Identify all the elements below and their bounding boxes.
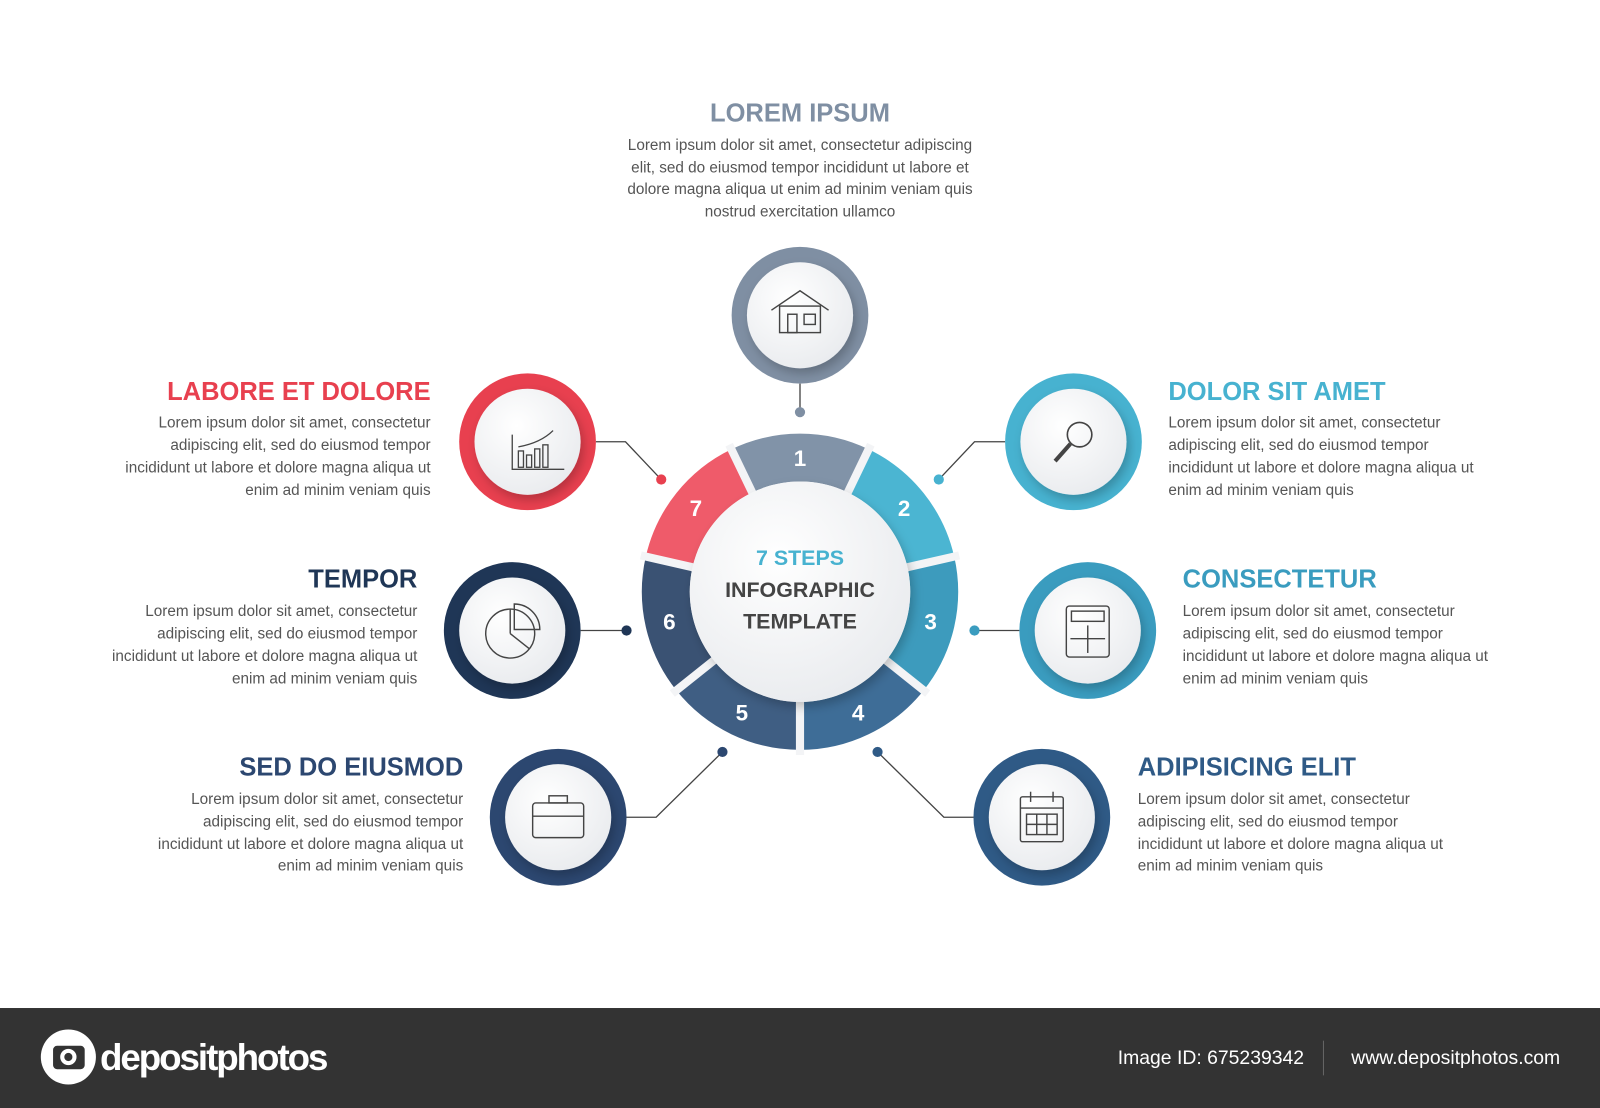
text: tempor: enim ad minim veniam quis xyxy=(232,671,418,688)
center ring chart: 1 xyxy=(794,446,806,471)
text: tempor: adipiscing elit, sed do eiusmod tempor xyxy=(157,626,417,643)
text: dolor sit amet: Lorem ipsum dolor sit amet, consectetur xyxy=(1168,414,1440,431)
text: lorem ipsum: elit, sed do eiusmod tempor incididunt ut labore et xyxy=(631,159,970,176)
text: labore et dolore: LABORE ET DOLORE xyxy=(167,378,431,406)
text: tempor: Lorem ipsum dolor sit amet, consectetur xyxy=(145,603,417,620)
text: labore et dolore: enim ad minim veniam quis xyxy=(245,482,431,499)
circle: tempor (pie chart) xyxy=(444,562,581,699)
circle: consectetur (calculator) xyxy=(1019,562,1156,699)
center ring chart: 4 xyxy=(852,700,865,725)
text: sed do eiusmod: enim ad minim veniam quis xyxy=(278,857,464,874)
text: adipisicing elit: ADIPISICING ELIT xyxy=(1138,753,1356,781)
center ring chart: 2 xyxy=(898,496,910,521)
text: labore et dolore: incididunt ut labore et dolore magna aliqua ut xyxy=(125,459,431,476)
text: sed do eiusmod: incididunt ut labore et dolore magna aliqua ut xyxy=(158,836,464,853)
footer bar: www.depositphotos.com xyxy=(1350,1047,1560,1069)
connector dots xyxy=(621,407,980,757)
text: consectetur: enim ad minim veniam quis xyxy=(1183,671,1368,688)
text: consectetur xyxy=(1183,566,1489,688)
footer logo xyxy=(41,1029,327,1085)
text: labore et dolore: adipiscing elit, sed do eiusmod tempor xyxy=(170,437,431,454)
text: lorem ipsum: LOREM IPSUM xyxy=(710,99,890,127)
center ring chart: 7 xyxy=(690,496,702,521)
text: lorem ipsum: dolore magna aliqua ut enim ad minim veniam quis xyxy=(627,181,973,198)
text: sed do eiusmod: SED DO EIUSMOD xyxy=(239,753,463,781)
text: adipisicing elit xyxy=(1138,753,1444,874)
text: consectetur: adipiscing elit, sed do eiusmod tempor xyxy=(1183,626,1443,643)
circle: labore et dolore (chart) xyxy=(459,373,596,510)
footer bar xyxy=(0,1008,1600,1108)
circle: adipisicing elit (calendar) xyxy=(973,749,1110,886)
text: lorem ipsum: Lorem ipsum dolor sit amet, consectetur adipiscing xyxy=(628,137,972,154)
text: dolor sit amet xyxy=(1168,378,1474,499)
text: tempor: incididunt ut labore et dolore magna aliqua ut xyxy=(112,648,418,665)
center ring chart xyxy=(611,403,989,780)
text: dolor sit amet: DOLOR SIT AMET xyxy=(1168,378,1386,406)
connector lines xyxy=(581,384,1019,817)
center ring chart: 5 xyxy=(736,700,748,725)
center ring chart: TEMPLATE xyxy=(743,609,857,633)
text: labore et dolore xyxy=(125,378,431,499)
text: lorem ipsum: nostrud exercitation ullamco xyxy=(705,203,895,220)
text: adipisicing elit: enim ad minim veniam quis xyxy=(1138,857,1323,874)
center ring chart: INFOGRAPHIC xyxy=(725,578,875,602)
text: consectetur: incididunt ut labore et dolore magna aliqua ut xyxy=(1183,648,1489,665)
text: dolor sit amet: enim ad minim veniam quis xyxy=(1168,482,1354,499)
text: tempor: TEMPOR xyxy=(308,566,417,594)
text: adipisicing elit: incididunt ut labore et dolore magna aliqua ut xyxy=(1138,836,1444,853)
center ring chart: 3 xyxy=(924,610,937,634)
text: lorem ipsum xyxy=(627,99,973,220)
circle: sed do eiusmod (briefcase) xyxy=(490,749,627,886)
footer id: Image ID: 675239342 xyxy=(1118,1047,1304,1069)
text: sed do eiusmod: Lorem ipsum dolor sit amet, consectetur xyxy=(191,791,463,808)
footer logo: depositphotos xyxy=(100,1037,327,1078)
text: consectetur: Lorem ipsum dolor sit amet, consectetur xyxy=(1183,603,1455,620)
center ring chart: 7 STEPS xyxy=(756,546,844,570)
text: dolor sit amet: adipiscing elit, sed do eiusmod tempor xyxy=(1168,437,1429,454)
text: tempor xyxy=(112,566,418,688)
circle: dolor sit amet (magnifier) xyxy=(1005,373,1142,510)
text: labore et dolore: Lorem ipsum dolor sit amet, consectetur xyxy=(159,414,431,431)
circle: lorem ipsum (house) xyxy=(732,247,868,384)
text: dolor sit amet: incididunt ut labore et dolore magna aliqua ut xyxy=(1168,459,1474,476)
text: sed do eiusmod xyxy=(158,753,464,874)
text: adipisicing elit: adipiscing elit, sed do eiusmod tempor xyxy=(1138,813,1398,830)
center ring chart: 6 xyxy=(663,610,676,634)
text: consectetur: CONSECTETUR xyxy=(1183,566,1377,594)
text: adipisicing elit: Lorem ipsum dolor sit amet, consectetur xyxy=(1138,791,1410,808)
text: sed do eiusmod: adipiscing elit, sed do eiusmod tempor xyxy=(203,813,463,830)
